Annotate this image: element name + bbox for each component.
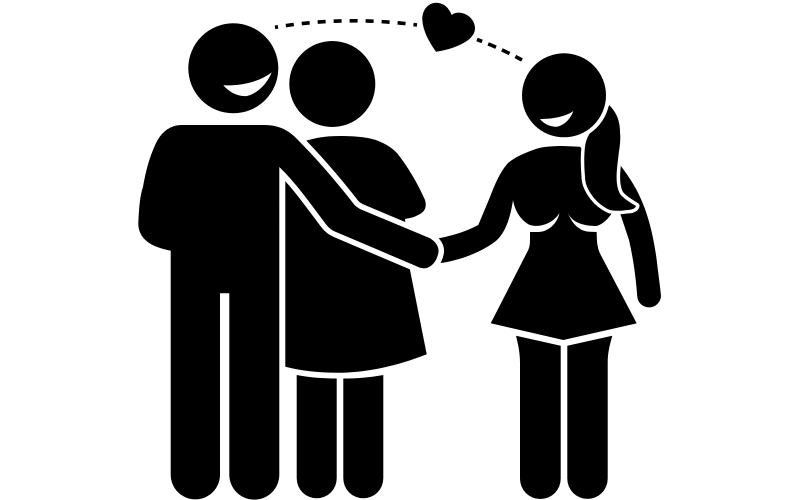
right leg bbox=[343, 375, 383, 498]
right arm bbox=[612, 158, 661, 307]
head bbox=[188, 23, 278, 113]
right bust crescent bbox=[568, 213, 597, 232]
left bust crescent bbox=[528, 213, 560, 232]
body and skirt bbox=[285, 136, 427, 373]
body, arm and legs bbox=[138, 125, 439, 500]
head bbox=[522, 53, 606, 137]
figure: man with arm around woman bbox=[138, 23, 439, 500]
figure: middle woman bbox=[285, 41, 427, 498]
left leg bbox=[297, 375, 337, 498]
smile bbox=[540, 111, 573, 127]
icon: heart bbox=[422, 3, 475, 52]
skirt, torso and left arm bbox=[430, 146, 637, 340]
smile bbox=[223, 72, 272, 96]
left leg bbox=[516, 336, 561, 499]
ponytail bbox=[584, 105, 636, 211]
dashed line: heart to woman bbox=[477, 40, 522, 60]
head bbox=[289, 41, 375, 127]
dashed line: man to heart bbox=[275, 21, 417, 27]
right leg bbox=[567, 336, 612, 499]
figure: right woman with ponytail bbox=[430, 53, 661, 499]
